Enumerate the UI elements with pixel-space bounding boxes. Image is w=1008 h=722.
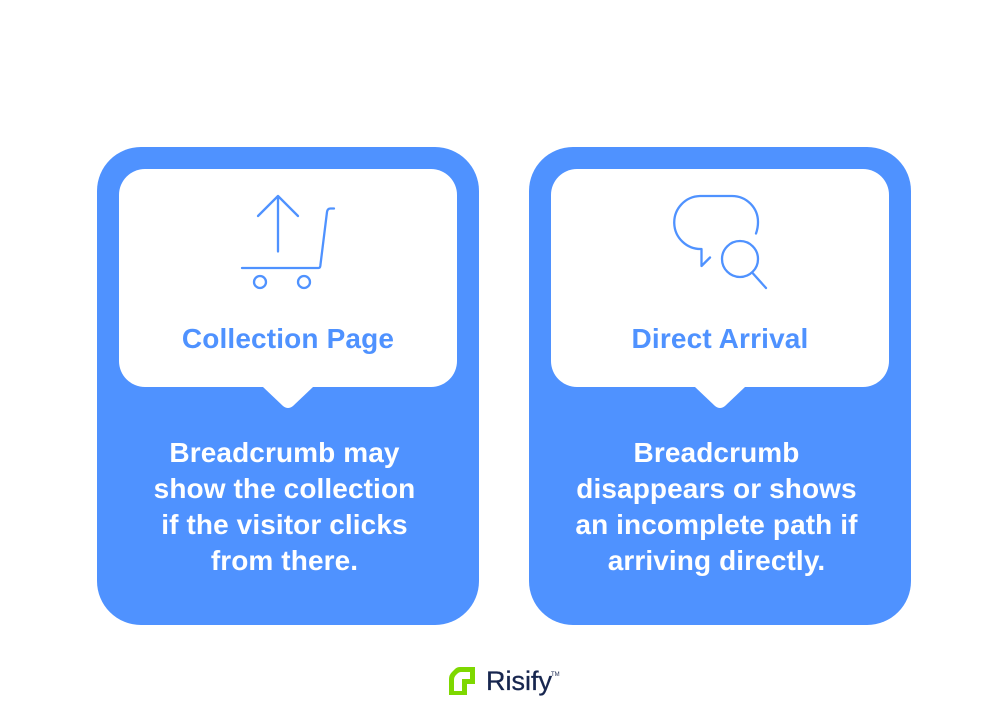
- panel: collection page: [97, 147, 479, 625]
- text: direct arrival description: disappears or shows: [576, 473, 857, 504]
- text: collection page description: from there.: [211, 545, 358, 576]
- text: collection page description: show the collection: [154, 473, 415, 504]
- callout pointer: [263, 387, 313, 408]
- text: direct arrival description: [575, 437, 858, 576]
- text: collection page description: Breadcrumb may: [169, 437, 400, 468]
- text: direct arrival description: Breadcrumb: [634, 437, 799, 468]
- callout pointer: [695, 387, 745, 408]
- text: direct arrival description: an incomplete path if: [575, 509, 858, 540]
- white callout: direct arrival: [551, 169, 889, 387]
- panel: direct arrival: [529, 147, 911, 625]
- heading: Collection Page: Collection Page: [182, 323, 394, 354]
- icon: speech bubble with magnifier: [673, 194, 768, 290]
- logo: Risify: [449, 666, 560, 696]
- white callout: collection page: [119, 169, 457, 387]
- trademark: TM: [551, 672, 560, 678]
- heading: Direct Arrival: Direct Arrival: [632, 323, 808, 354]
- icon: shopping cart with up arrow: [240, 194, 336, 290]
- text: collection page description: [154, 437, 415, 576]
- text: collection page description: if the visitor clicks: [161, 509, 408, 540]
- wordmark: Risify: [486, 666, 552, 696]
- icon: Risify mark: [449, 667, 475, 695]
- text: direct arrival description: arriving directly.: [608, 545, 825, 576]
